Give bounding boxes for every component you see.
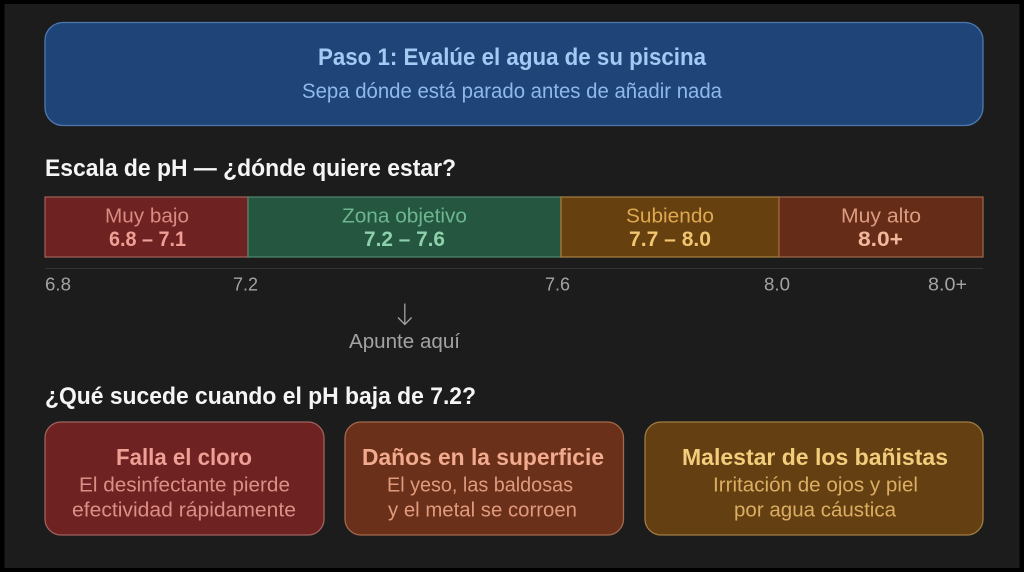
card: surface damage: El yeso, las baldosas — [387, 474, 573, 496]
scale tick labels: 8.0+ — [928, 274, 967, 294]
scale tick labels — [45, 274, 967, 294]
banner title: Paso 1: Evalúe el agua de su piscina — [318, 44, 707, 71]
card: bather discomfort: Irritación de ojos y piel — [713, 474, 918, 496]
segment: very high — [779, 197, 983, 257]
segment: rising — [561, 197, 779, 257]
card: bather discomfort — [645, 422, 983, 535]
card: surface damage: Daños en la superficie — [362, 444, 604, 470]
segment: very high: 8.0+ — [858, 227, 903, 251]
scale tick labels: 7.2 — [233, 274, 258, 294]
label: aim here: Apunte aquí — [349, 330, 460, 353]
card: chlorine fails: El desinfectante pierde — [79, 474, 290, 496]
scale tick labels: 7.6 — [545, 274, 570, 294]
card: bather discomfort: Malestar de los bañistas — [682, 444, 948, 470]
banner subtitle: Sepa dónde está parado antes de añadir nada — [302, 80, 722, 103]
pH scale bar — [45, 197, 983, 257]
segment: very high: Muy alto — [841, 204, 921, 228]
segment: target zone — [248, 197, 561, 257]
card: surface damage — [345, 422, 624, 535]
segment: target zone: 7.2 – 7.6 — [364, 227, 445, 251]
card: chlorine fails: efectividad rápidamente — [72, 498, 296, 522]
segment: very low: 6.8 – 7.1 — [109, 227, 186, 251]
segment: rising: 7.7 – 8.0 — [629, 227, 711, 251]
header banner — [45, 22, 983, 126]
heading: below 7.2: ¿Qué sucede cuando el pH baja de 7.2? — [45, 383, 476, 410]
heading: pH scale: Escala de pH — ¿dónde quiere estar? — [45, 155, 456, 182]
segment: rising: Subiendo — [626, 204, 714, 228]
card: chlorine fails — [45, 422, 324, 535]
segment: very low: Muy bajo — [105, 204, 189, 228]
arrow: points to target zone — [398, 304, 412, 324]
card: bather discomfort: por agua cáustica — [734, 498, 897, 522]
segment: target zone: Zona objetivo — [342, 204, 467, 228]
scale tick labels: 8.0 — [764, 274, 790, 294]
segment: very low — [45, 197, 248, 257]
scale tick labels: 6.8 — [45, 274, 71, 294]
card: chlorine fails: Falla el cloro — [116, 444, 252, 470]
card: surface damage: y el metal se corroen — [388, 498, 577, 522]
